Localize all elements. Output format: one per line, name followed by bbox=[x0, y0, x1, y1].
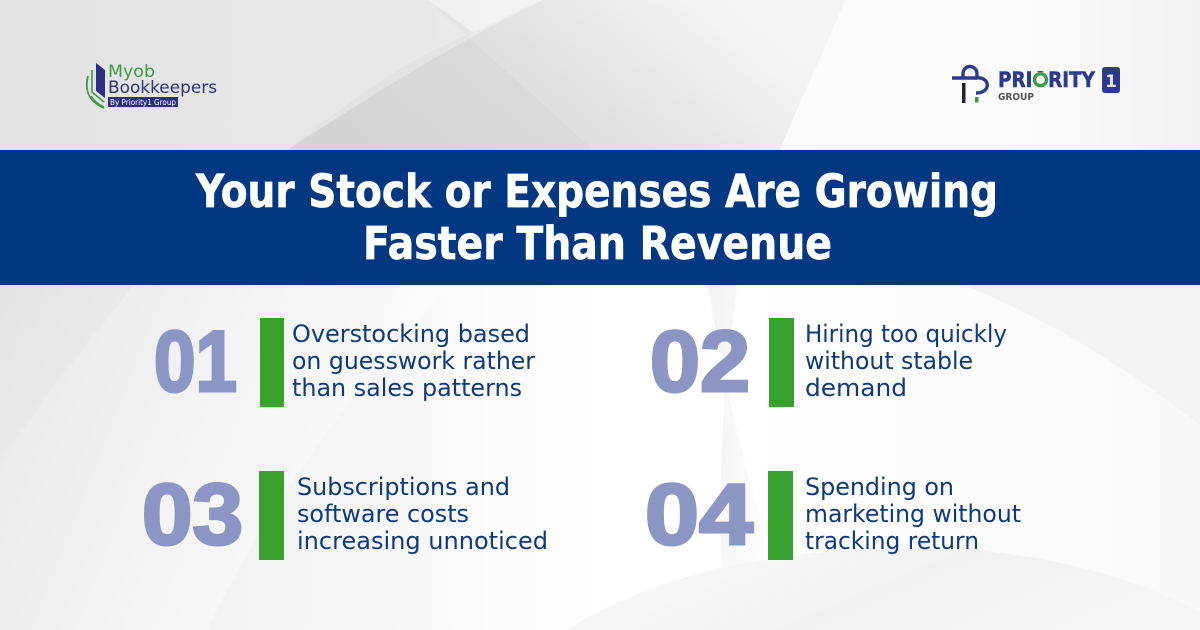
logo wordmark bbox=[998, 67, 1120, 103]
logo wordmark: PRIORITY bbox=[998, 68, 1096, 92]
number 03: 03 bbox=[142, 467, 243, 563]
text: item 04: marketing without bbox=[805, 500, 1021, 528]
text: item 04 bbox=[805, 473, 1021, 555]
text: item 03: Subscriptions and bbox=[297, 473, 510, 501]
logo wordmark bbox=[108, 62, 217, 107]
text: item 03: increasing unnoticed bbox=[297, 527, 548, 555]
title band bbox=[0, 150, 1200, 285]
icon: book and leaf bbox=[87, 63, 105, 108]
title: Faster Than Revenue bbox=[363, 217, 832, 270]
item 04 bbox=[645, 467, 1021, 563]
title bbox=[195, 165, 998, 270]
text: item 01: Overstocking based bbox=[292, 320, 530, 348]
logo wordmark: Myob bbox=[108, 62, 155, 82]
green bar bbox=[769, 318, 794, 407]
icon: P1 monogram bbox=[952, 66, 987, 103]
green bar bbox=[260, 318, 284, 407]
item 01 bbox=[154, 314, 535, 410]
text: item 03 bbox=[297, 473, 548, 555]
logo: Myob Bookkeepers bbox=[87, 62, 217, 108]
text: item 02: without stable bbox=[805, 347, 973, 375]
item 03 bbox=[142, 467, 548, 563]
green bar bbox=[768, 471, 793, 560]
text: item 01: on guesswork rather bbox=[292, 347, 535, 375]
text: item 02 bbox=[805, 320, 1007, 402]
text: item 02: demand bbox=[805, 374, 907, 402]
logo wordmark: By Priority1 Group bbox=[110, 98, 176, 107]
text: item 01 bbox=[292, 320, 535, 402]
text: item 03: software costs bbox=[297, 500, 469, 528]
logo wordmark: Bookkeepers bbox=[108, 78, 217, 98]
top shapes bbox=[287, 0, 1200, 150]
item 02 bbox=[650, 314, 1007, 410]
text: item 02: Hiring too quickly bbox=[805, 320, 1007, 348]
title: Your Stock or Expenses Are Growing bbox=[195, 165, 998, 218]
logo: Priority 1 Group bbox=[952, 66, 1120, 103]
logo wordmark: 1 bbox=[1105, 72, 1117, 92]
text: item 04: Spending on bbox=[805, 473, 954, 501]
number 04: 04 bbox=[645, 467, 753, 563]
bottom shapes bbox=[0, 285, 1200, 630]
number 02: 02 bbox=[650, 314, 750, 410]
green bar bbox=[259, 471, 284, 560]
text: item 01: than sales patterns bbox=[292, 374, 522, 402]
text: item 04: tracking return bbox=[805, 527, 979, 555]
number 01: 01 bbox=[154, 314, 237, 410]
logo wordmark: GROUP bbox=[998, 92, 1034, 103]
